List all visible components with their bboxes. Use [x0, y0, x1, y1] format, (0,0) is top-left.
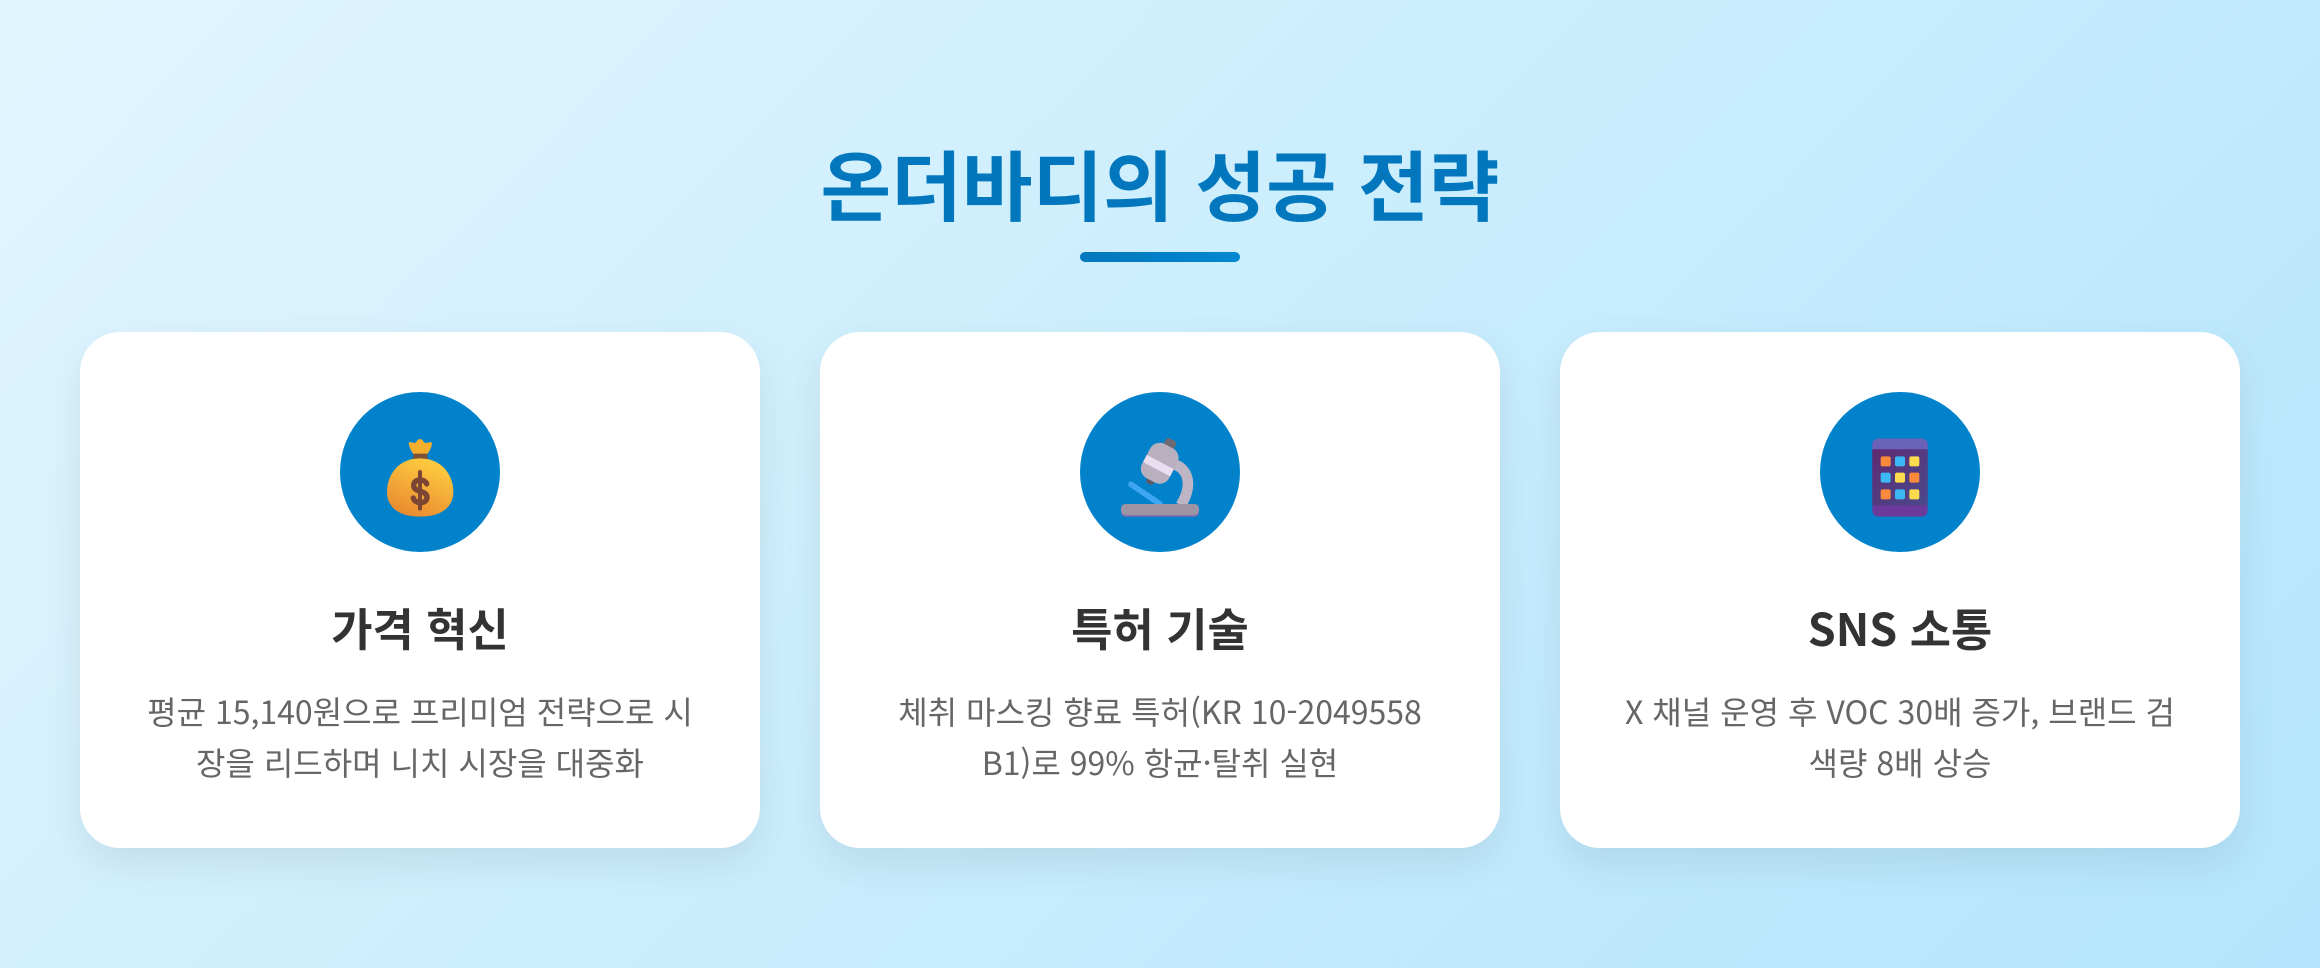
text: price innovation description: 평균 15,140원으로 프리미엄 전략으로 시: [147, 688, 693, 734]
text: price innovation description: [147, 688, 693, 785]
panel: SNS communication: [1560, 332, 2240, 848]
title: 온더바디의 성공 전략: [821, 127, 1499, 238]
heading: patent technology: 특허 기술: [1071, 594, 1249, 659]
icon: money bag: [340, 392, 500, 552]
heading: price innovation: 가격 혁신: [331, 594, 509, 659]
dollar sign: [413, 472, 427, 509]
text: SNS communication description: X 채널 운영 후 VOC 30배 증가, 브랜드 검: [1625, 688, 2175, 734]
text: SNS communication description: 색량 8배 상승: [1809, 739, 1991, 785]
title underline: [1080, 252, 1240, 262]
icon: microscope: [1080, 392, 1240, 552]
text: patent technology description: B1)로 99% 항균·탈취 실현: [982, 739, 1338, 785]
heading: SNS communication: SNS 소통: [1808, 594, 1992, 659]
panel: patent technology: [820, 332, 1500, 848]
text: patent technology description: 체취 마스킹 향료 특허(KR 10-2049558: [898, 688, 1422, 734]
text: SNS communication description: [1625, 688, 2175, 785]
icon: tablet with app grid: [1820, 392, 1980, 552]
text: price innovation description: 장을 리드하며 니치 시장을 대중화: [196, 739, 644, 785]
text: patent technology description: [898, 688, 1422, 785]
panel: price innovation: [80, 332, 760, 848]
